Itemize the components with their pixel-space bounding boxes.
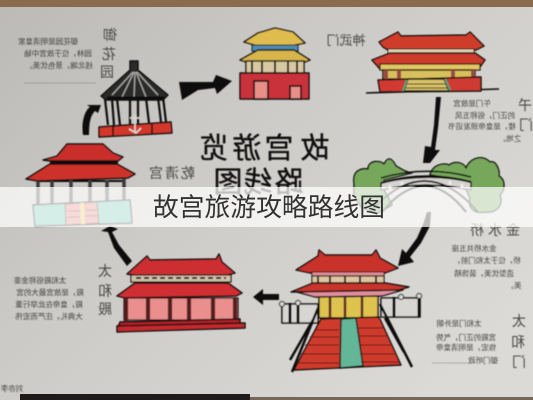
arrow: Wumen to Golden Water Bridge xyxy=(423,97,441,163)
arrow: Hall of Supreme Harmony to Qianqing Palace xyxy=(101,226,132,266)
note: Imperial Garden xyxy=(18,36,96,83)
note: Hall of Supreme Harmony: 殿，是故宫最大的宫 xyxy=(16,287,84,297)
label: Gate of Supreme Harmony xyxy=(511,313,526,370)
mirrored hand-lettered heading: 故 xyxy=(300,132,330,165)
label: Golden Water Bridge: 金水桥 xyxy=(466,222,520,238)
building: Taihe Gate with stairs xyxy=(280,250,422,372)
mirrored hand-lettered heading: 图 xyxy=(213,167,243,199)
mirrored hand-lettered heading: 路 xyxy=(274,166,304,199)
note: Imperial Garden: 御花园是明清皇家 xyxy=(18,36,78,46)
label: Imperial Garden: 花 xyxy=(102,46,116,62)
label: Hall of Supreme Harmony: 和 xyxy=(98,283,112,299)
note: Gate of Supreme Harmony: 太和门是外朝 xyxy=(436,318,482,328)
note: Gate of Supreme Harmony: 恢宏，是明清皇帝 xyxy=(436,342,496,352)
illustration: bridge and trees xyxy=(354,158,504,213)
label: Meridian Gate: 门 xyxy=(519,117,533,133)
label: Meridian Gate xyxy=(518,97,533,133)
note: Hall of Supreme Harmony: 殿，皇帝在此举行重 xyxy=(15,299,83,309)
note: Gate of Supreme Harmony: 宫殿的正门，气势 xyxy=(436,332,496,342)
label: Gate of Supreme Harmony: 门 xyxy=(512,354,526,370)
label: Meridian Gate: 午 xyxy=(518,97,532,113)
label: Imperial Garden: 园 xyxy=(100,64,114,80)
note: Gate of Supreme Harmony xyxy=(432,318,498,365)
note: Meridian Gate xyxy=(448,98,521,143)
note: Golden Water Bridge xyxy=(451,243,522,290)
label: author signature: 刘亦李 xyxy=(0,383,23,393)
mirrored hand-lettered heading: 线 xyxy=(243,166,273,199)
label: Qianqing Palace: 乾清宫 xyxy=(147,165,195,181)
label: Shenwu Gate: 神武门 xyxy=(326,33,366,48)
building: Shenwu Gate tower xyxy=(240,28,310,99)
note: Meridian Gate: 午门是故宫 xyxy=(453,98,491,108)
label: Hall of Supreme Harmony: 太 xyxy=(98,263,112,279)
note: Meridian Gate: 之地。 xyxy=(499,133,521,143)
label: Imperial Garden: 御 xyxy=(103,27,117,43)
note: Golden Water Bridge: 造型优美，装饰精 xyxy=(454,268,514,278)
arrow: Taihe Gate to Hall of Supreme Harmony xyxy=(253,289,279,305)
note: Imperial Garden: 园林，位于故宫中轴 xyxy=(24,48,92,58)
note: Meridian Gate: 楼，是皇帝颁发诏书 xyxy=(448,121,516,131)
building: Hall of Supreme Harmony xyxy=(117,254,245,332)
title band xyxy=(0,187,533,227)
arrow: Qianqing Palace to Imperial Garden xyxy=(82,105,101,135)
mirrored hand-lettered heading: 游 xyxy=(232,132,262,165)
label: Gate of Supreme Harmony: 太 xyxy=(512,313,526,329)
building: Wumen gate hall xyxy=(366,32,499,93)
mirrored hand-lettered heading: 宫 xyxy=(264,132,294,165)
note: Golden Water Bridge: 美。 xyxy=(506,280,522,290)
note: Golden Water Bridge: 金水桥共五座 xyxy=(451,243,496,253)
note: Gate of Supreme Harmony: 御门听政 xyxy=(468,355,498,365)
note: Hall of Supreme Harmony: 太和殿俗称金銮 xyxy=(13,275,66,285)
arrow: Imperial Garden to Shenwu Gate xyxy=(179,75,232,100)
note: Hall of Supreme Harmony xyxy=(13,275,84,321)
label: Imperial Garden xyxy=(100,27,117,80)
label: Hall of Supreme Harmony: 殿 xyxy=(98,301,112,317)
page title: 故宫旅游攻略路线图 xyxy=(153,193,385,222)
building: Qianqing Palace xyxy=(26,144,135,226)
mirrored hand-lettered heading: 览 xyxy=(199,132,229,165)
label: Gate of Supreme Harmony: 和 xyxy=(511,334,525,350)
note: Imperial Garden: 线北端，景色优美。 xyxy=(25,60,93,70)
mirrored hand-lettered heading xyxy=(199,132,330,199)
arrow: bridge to Taihe Gate xyxy=(398,212,431,266)
building: Imperial Garden pavilion xyxy=(99,61,172,137)
note: Golden Water Bridge: 桥，位于太和门前， xyxy=(453,255,521,265)
note: Meridian Gate: 的正门，俗称五凤 xyxy=(455,110,515,120)
label: Hall of Supreme Harmony xyxy=(98,263,112,317)
note: Hall of Supreme Harmony: 大典礼，庄严而宏伟 xyxy=(15,311,83,321)
